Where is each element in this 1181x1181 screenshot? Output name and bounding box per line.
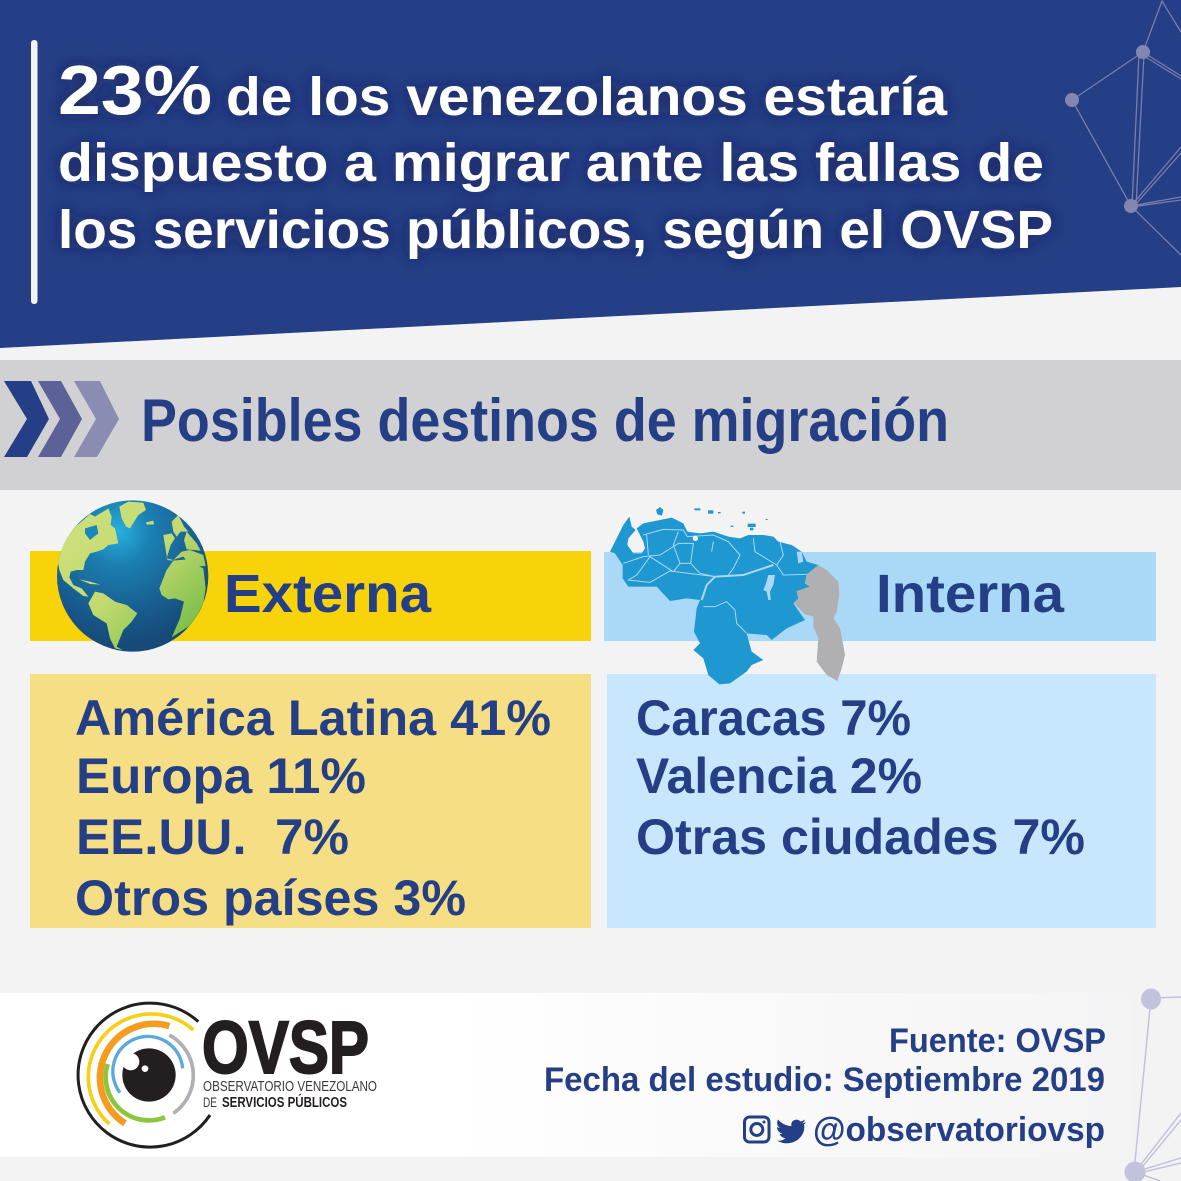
source text: Fecha del estudio: Septiembre 2019 [544, 1061, 1105, 1099]
title: 23% [58, 51, 212, 129]
section heading: Posibles destinos de migración [141, 387, 949, 454]
source text: @observatoriovsp [813, 1111, 1105, 1149]
source text [544, 1022, 1106, 1149]
OVSP logo: DE [203, 1094, 217, 1110]
title: los servicios públicos, según el OVSP [58, 200, 1053, 260]
interna values: Caracas 7% [636, 690, 911, 746]
externa values: Europa 11% [76, 748, 366, 804]
interna header bar [604, 552, 1156, 641]
icon: globe [57, 500, 208, 652]
externa values: América Latina 41% [75, 690, 551, 746]
title accent bar [31, 40, 38, 304]
network decoration: bottom right [1124, 988, 1181, 1181]
icon: Venezuela map [610, 507, 845, 684]
panel: externa [30, 500, 591, 928]
header panel [0, 0, 1181, 348]
section band: posibles destinos [0, 360, 1181, 490]
OVSP logo: SERVICIOS PÚBLICOS [222, 1093, 347, 1111]
title: de los venezolanos estaría [226, 67, 948, 127]
icon: chevrons [4, 381, 119, 457]
externa label: Externa [224, 564, 432, 624]
externa values: EE.UU. 7% [76, 809, 349, 865]
title: dispuesto a migrar ante las fallas de [58, 133, 1044, 193]
OVSP logo [78, 1003, 377, 1147]
logo subtitle: OBSERVATORIO VENEZOLANO [203, 1079, 377, 1095]
panel: interna [604, 507, 1156, 928]
interna values: Valencia 2% [636, 748, 922, 804]
logo wordmark: OVSP [202, 1006, 369, 1089]
externa list box [30, 674, 591, 928]
interna list box [607, 674, 1156, 928]
title [58, 51, 1053, 260]
logo symbol: eye and rings [78, 1003, 210, 1147]
source text: Fuente: OVSP [889, 1022, 1106, 1060]
interna label: Interna [876, 564, 1065, 624]
icon: twitter [777, 1120, 806, 1143]
interna values [636, 690, 1085, 865]
footer band [0, 988, 1181, 1181]
icon: instagram [744, 1117, 769, 1142]
externa values [75, 690, 551, 926]
network decoration: top right [1065, 1, 1181, 255]
interna values: Otras ciudades 7% [636, 809, 1085, 865]
externa header bar [30, 551, 591, 641]
externa values: Otros países 3% [75, 870, 466, 926]
